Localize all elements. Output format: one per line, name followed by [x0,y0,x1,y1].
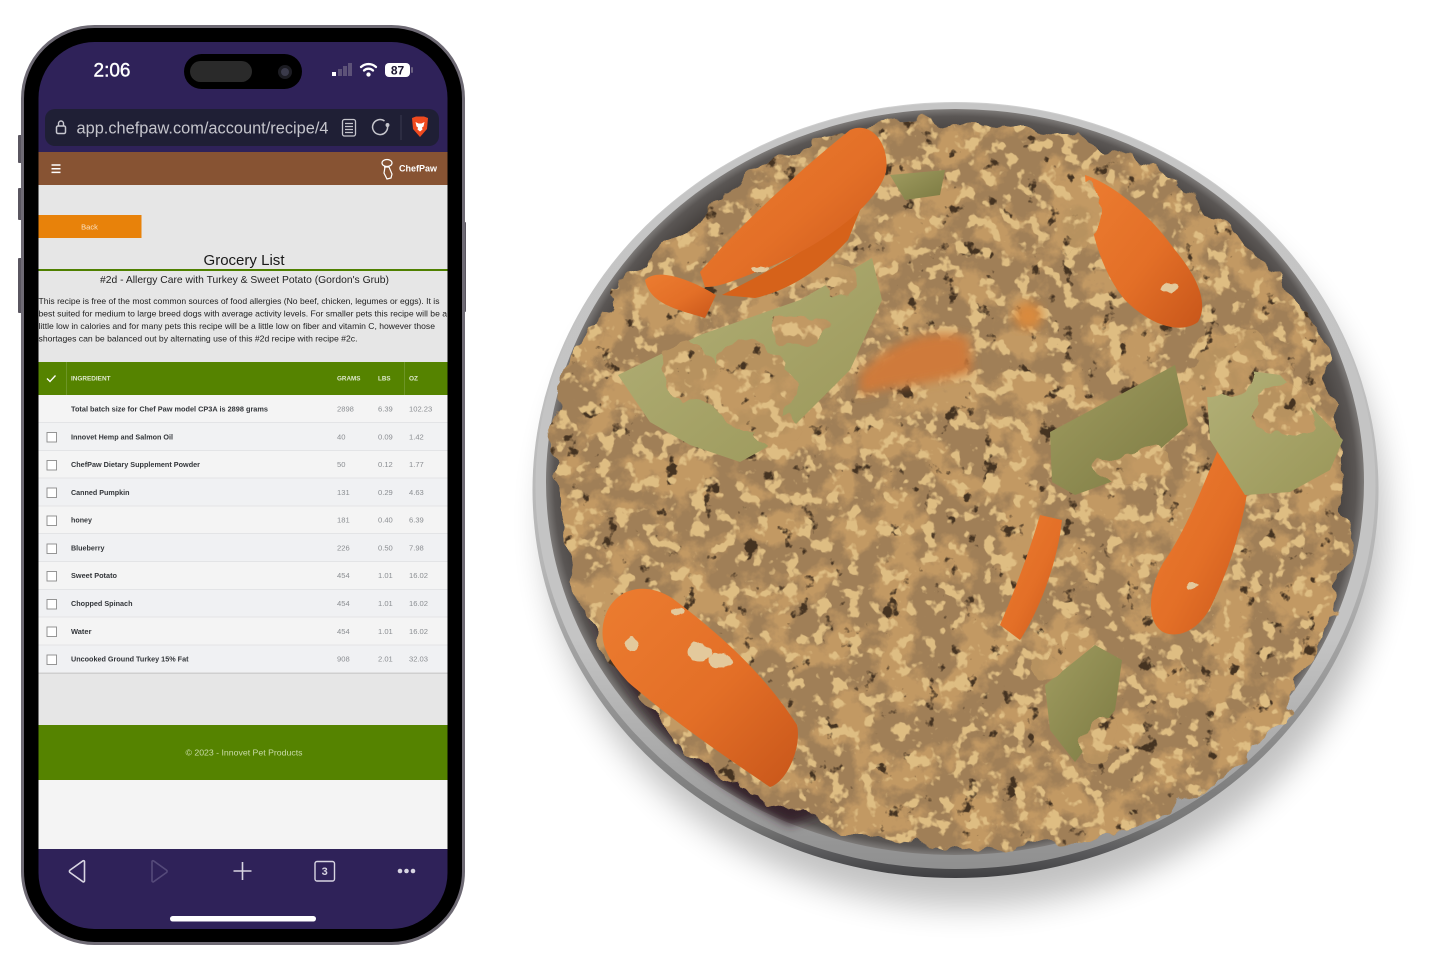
maroon liquid at lower left [585,590,830,825]
row: canned pumpkin: Canned Pumpkin [71,488,130,497]
phone side buttons [18,135,466,313]
new tab icon [234,862,252,880]
row: hemp and salmon oil: 0.09 [378,432,393,441]
row: supplement powder: 1.77 [409,460,424,469]
browser toolbar [38,849,448,930]
row: chopped spinach: 16.02 [409,599,428,608]
row: sweet potato: 454 [337,571,350,580]
row: canned pumpkin: 4.63 [409,488,424,497]
row: hemp and salmon oil [47,432,424,442]
row: honey [47,516,424,526]
carrot: center sliver [1000,515,1062,640]
recipe description: shortages can be balanced out by alternating use of this #2d recipe with recipe #2c. [38,334,358,344]
reload icon [373,120,389,135]
phone mockup [18,26,466,944]
squash chunks [618,170,1343,762]
carrot: center fragment [860,334,972,395]
row: hemp and salmon oil: 1.42 [409,432,424,441]
page footer [38,725,448,780]
row: blueberry: 226 [337,543,350,552]
row: total batch size: 102.23 [409,404,432,414]
row: total batch size: 6.39 [378,404,393,414]
row: supplement powder: 0.12 [378,460,393,469]
row: supplement powder [47,460,424,470]
row: water: 16.02 [409,627,428,636]
recipe description [38,296,447,344]
row: honey: 6.39 [409,516,424,525]
lock icon [56,121,66,134]
back button: Back [81,222,98,232]
row: chopped spinach [47,599,428,609]
carrot: right [1151,445,1250,634]
reader icon [342,120,356,136]
table header: OZ [409,376,418,382]
wifi icon [361,64,376,76]
crumbs on carrots [626,265,1198,668]
purple status background [38,42,448,152]
row: honey: 181 [337,516,350,525]
carrot: upper right [1085,175,1202,328]
blank page area [38,780,448,849]
row: canned pumpkin: 131 [337,488,350,497]
squash chunk: center left [618,258,882,462]
recipe subtitle: #2d - Allergy Care with Turkey & Sweet Potato (Gordon's Grub) [100,274,389,286]
row: supplement powder: 50 [337,460,345,469]
row: sweet potato: Sweet Potato [71,571,118,580]
squash chunk: lower [1045,645,1122,762]
grocery list title: Grocery List [204,252,285,269]
row: canned pumpkin: 0.29 [378,488,393,497]
tabs count icon: 3 [322,866,328,878]
squash chunk: far right [1205,365,1343,495]
title rule [38,269,448,271]
ingredient table [38,362,448,674]
carrot: small left [645,275,716,318]
food bowl photo [532,102,1385,907]
battery: 87 [391,64,404,78]
row: total batch size [71,406,432,413]
row: water [47,627,428,636]
row: chopped spinach: Chopped Spinach [71,599,132,608]
table header: LBS [378,376,390,382]
carrots [602,128,1250,787]
row: water: Water [71,627,92,636]
row: hemp and salmon oil: Innovet Hemp and Salmon Oil [71,432,173,441]
row: honey: honey [71,516,93,525]
page content background [38,185,448,725]
table row backgrounds [38,395,448,674]
phone screen [38,42,448,930]
bowl rim silver band [536,103,1376,869]
phone body [22,26,464,944]
row: blueberry: 7.98 [409,543,424,552]
forward arrow icon [152,861,167,882]
carrot: bottom left [602,589,798,787]
tabs count icon [315,862,334,881]
carrot: top rear [722,205,862,298]
row: hemp and salmon oil: 40 [337,432,345,441]
bowl interior [546,109,1364,855]
row: chopped spinach: 454 [337,599,350,608]
table header: INGREDIENT [71,376,111,382]
url text: app.chefpaw.com/account/recipe/4 [76,118,328,138]
address bar [45,109,439,146]
menu icon [52,165,60,172]
row: ground turkey: 2.01 [378,655,393,664]
row: honey: 0.40 [378,516,393,525]
chefpaw logo: ChefPaw [399,164,438,174]
squash chunk: top [890,170,945,200]
row: total batch size: 2898 [337,404,354,414]
page footer: © 2023 - Innovet Pet Products [186,748,302,758]
row: ground turkey: 32.03 [409,655,428,664]
row: blueberry: 0.50 [378,543,393,552]
carrot: top front [700,128,887,287]
row: canned pumpkin [47,488,424,498]
carrot: small bit upper center [1014,302,1042,330]
squash chunk: center right [1050,365,1188,495]
chefpaw logo [382,160,438,179]
back button [38,215,142,238]
row: blueberry: Blueberry [71,543,105,552]
row: sweet potato: 1.01 [378,571,393,580]
row: ground turkey: 908 [337,655,350,664]
bowl shadow [545,137,1385,907]
recipe description: This recipe is free of the most common sources of food allergies (No beef, chicken, legumes or eggs). It is [38,296,439,306]
dynamic island [184,54,302,89]
more menu icon [398,869,415,873]
back arrow icon [69,861,84,882]
recipe description: best suited for medium to large breed dogs with average activity levels. For smaller pets this recipe will be a [38,308,447,318]
row: blueberry [47,543,424,554]
home indicator [170,916,316,922]
row: sweet potato [47,571,428,581]
table header [38,362,448,395]
row: water: 454 [337,627,350,636]
table header: GRAMS [337,376,360,382]
row: chopped spinach: 1.01 [378,599,393,608]
row: ground turkey: Uncooked Ground Turkey 15% Fat [71,655,189,664]
bowl rim outer edge [532,102,1378,878]
brown nav bar [38,152,448,185]
brave shield icon [412,116,428,137]
row: total batch size: Total batch size for Chef Paw model CP3A is 2898 grams [71,404,268,414]
row: supplement powder: ChefPaw Dietary Supplement Powder [71,460,200,469]
row: sweet potato: 16.02 [409,571,428,580]
row: ground turkey [47,655,428,664]
row: water: 1.01 [378,627,393,636]
signal bars [332,63,352,76]
status time: 2:06 [94,60,130,82]
recipe description: little low in calories and for many pets this recipe will be a little low on fiber and vitamin C, however those [38,321,435,331]
food base [554,123,1345,848]
battery [385,63,413,78]
crumb clumps over vegetables [660,178,1317,762]
